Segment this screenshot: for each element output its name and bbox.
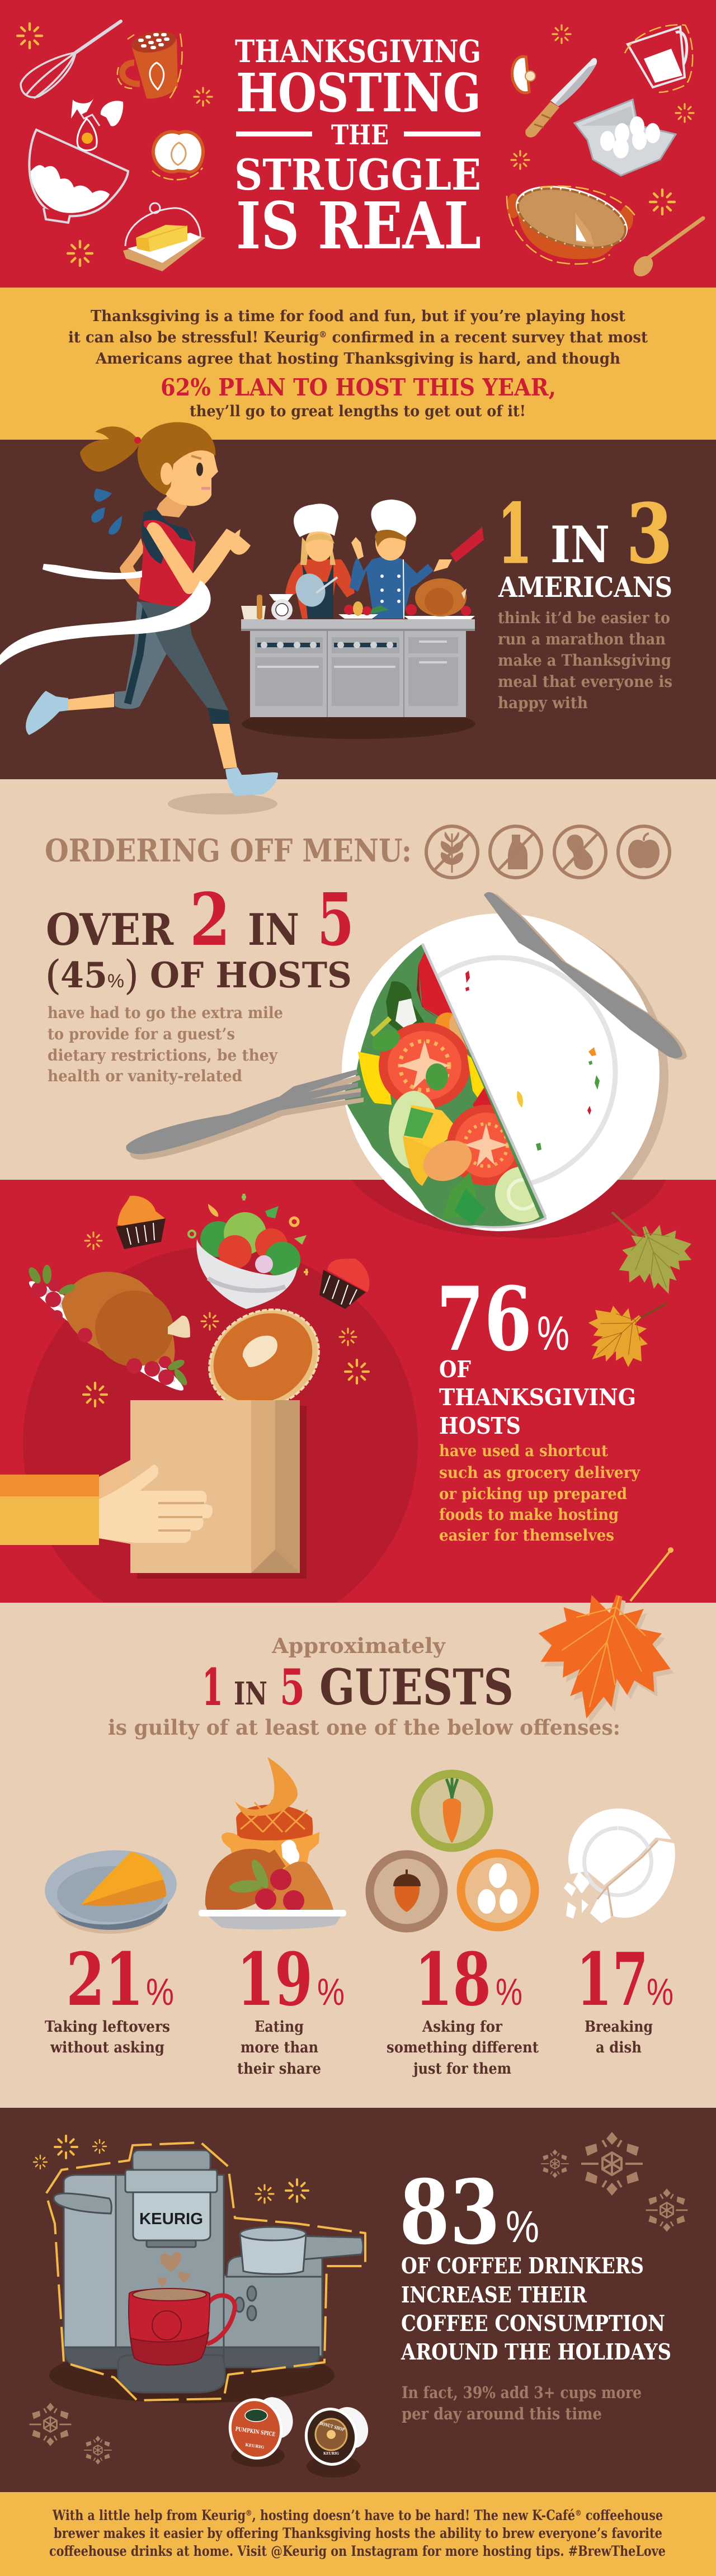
heading: is guilty of at least one of the below offenses: — [108, 1715, 620, 1740]
label: Keurig logo: KEURIG — [139, 2210, 203, 2228]
woman chef — [285, 504, 355, 619]
title: STRUGGLE — [234, 150, 481, 200]
panel: 83% coffee drinkers: OF COFFEE DRINKERS — [401, 2253, 644, 2279]
heading: Approximately — [271, 1633, 446, 1658]
panel: 76% of hosts: foods to make hosting — [439, 1505, 619, 1524]
icon: whisk — [21, 21, 121, 98]
panel: 76% of hosts: have used a shortcut — [439, 1442, 608, 1460]
panel: footer text: , hosting doesn’t have to be hard! The new K-Café — [252, 2507, 575, 2523]
panel: 1 in 3 Americans: IN — [550, 515, 610, 574]
cupcake red — [319, 1259, 370, 1309]
icon: mixing bowl with egg — [29, 98, 128, 223]
panel: 1 in 5 guests — [43, 1633, 675, 2078]
panel: 1 in 3 Americans: run a marathon than — [498, 630, 666, 648]
cupcake orange — [116, 1196, 166, 1249]
panel: 83% coffee drinkers — [399, 2161, 671, 2423]
panel: hero header — [17, 21, 703, 280]
panel: 76% of hosts: OF — [439, 1356, 471, 1383]
panel: 1 in 3 Americans: meal that everyone is — [498, 672, 672, 691]
crumbs — [465, 971, 600, 1151]
title: THE — [331, 119, 389, 151]
stats row: % — [496, 1971, 522, 2013]
title: THANKSGIVING — [235, 33, 481, 69]
icon: eggs in circle — [461, 1853, 535, 1927]
icon: sparkles — [17, 23, 694, 266]
icon: coffee hearts — [158, 2252, 190, 2287]
panel: intro text: it can also be stressful! Keurig — [68, 329, 329, 346]
icon: no dairy — [490, 826, 541, 878]
stats row: Eating — [255, 2018, 304, 2036]
panel: over 2 in 5 hosts: 45 — [60, 954, 107, 996]
icon: apple — [618, 826, 670, 878]
panel: over 2 in 5 hosts: to provide for a guest’s — [48, 1025, 235, 1043]
panel: 1 in 3 Americans — [498, 487, 672, 712]
panel: footer text: With a little help from Keurig — [53, 2507, 286, 2523]
panel: 1 in 3 Americans: 1 — [498, 487, 532, 582]
man chef — [350, 500, 484, 619]
stats row: their share — [237, 2060, 321, 2078]
panel: over 2 in 5 hosts: % — [107, 971, 124, 992]
icon: turkey and pie stack — [199, 1757, 346, 1929]
icon: apple slice — [510, 56, 535, 95]
panel: over 2 in 5 hosts: ) — [124, 952, 139, 999]
panel: 83% coffee drinkers: % — [506, 2202, 539, 2252]
panel: 83% coffee drinkers: 83 — [399, 2161, 500, 2264]
icon: donut shop pod — [300, 2401, 375, 2478]
panel: grocery shortcut illustration — [0, 1194, 418, 1641]
panel: 1 in 3 Americans: think it’d be easier to — [498, 609, 670, 627]
panel: 1 in 3 Americans: happy with — [498, 694, 588, 712]
icon: egg carton — [574, 100, 676, 176]
icon: broken plate — [564, 1809, 675, 1923]
hand holding bag — [0, 1460, 213, 1545]
stats row: a dish — [596, 2039, 642, 2056]
icon: autumn leaves — [569, 1212, 705, 1385]
icon: pumpkin spice pod: PUMPKIN SPICE — [235, 2426, 276, 2438]
stats row: just for them — [412, 2060, 511, 2078]
icon: large orange maple leaf — [520, 1547, 689, 1741]
panel: intro text: they’ll go to great lengths to get out of it! — [190, 403, 526, 420]
heading: ORDERING OFF MENU: — [45, 832, 412, 869]
stats row — [45, 1937, 673, 2078]
panel: 1 in 3 Americans: AMERICANS — [498, 571, 672, 604]
panel: intro text — [68, 308, 648, 420]
icon: no wheat — [426, 826, 478, 878]
stats row: Asking for — [422, 2018, 503, 2036]
panel: 83% coffee drinkers: COFFEE CONSUMPTION — [401, 2311, 665, 2337]
panel: over 2 in 5 hosts: 2 — [190, 878, 230, 962]
salad bowl — [189, 1194, 308, 1309]
panel: intro text: Americans agree that hosting Thanksgiving is hard, and though — [95, 350, 620, 368]
icon: pie slice on plate — [43, 1846, 179, 1934]
stats row: 17 — [576, 1937, 648, 2022]
panel: 76% of hosts — [436, 1212, 705, 1544]
panel: footer text — [49, 2507, 666, 2559]
title: HOSTING — [236, 62, 481, 124]
panel: 76% of hosts: or picking up prepared — [439, 1485, 627, 1503]
title — [234, 33, 481, 264]
panel: 1 in 3 Americans: 3 — [626, 487, 672, 582]
panel: over 2 in 5 hosts: dietary restrictions, be they — [48, 1046, 278, 1065]
icon: halved apple — [152, 132, 203, 180]
panel: 76% of hosts: HOSTS — [439, 1412, 521, 1439]
panel: over 2 in 5 hosts: 5 — [317, 878, 354, 962]
illustration: kitchen counter with chefs — [241, 500, 484, 739]
icon: donut shop pod: DONUT SHOP — [319, 2420, 345, 2432]
heading — [108, 1633, 620, 1740]
icon: mug — [117, 28, 182, 101]
stats row: 18 — [414, 1937, 491, 2022]
panel: 83% coffee drinkers: In fact, 39% add 3+ cups more — [402, 2383, 642, 2402]
dashed outline — [46, 2142, 365, 2400]
panel: 83% coffee drinkers: INCREASE THEIR — [401, 2282, 587, 2308]
panel: ordering off menu — [45, 826, 670, 878]
icon: knife — [525, 58, 597, 138]
panel: over 2 in 5 hosts — [45, 878, 354, 1085]
salad — [342, 944, 551, 1228]
icon: no peanuts — [554, 826, 606, 878]
stats row: more than — [241, 2039, 318, 2056]
stats row: % — [647, 1971, 673, 2013]
panel: intro text: ® — [319, 329, 327, 340]
fork — [126, 1070, 364, 1160]
panel: 1 in 3 Americans: make a Thanksgiving — [498, 651, 671, 670]
callout: 62% plan to host: 62% PLAN TO HOST THIS YEAR, — [161, 374, 556, 401]
panel: intro text: Thanksgiving is a time for food and fun, but if you’re playing host — [91, 308, 626, 325]
panel: over 2 in 5 hosts: ( — [45, 952, 62, 999]
stats row: % — [317, 1971, 345, 2013]
panel: 83% coffee drinkers: per day around this time — [402, 2404, 602, 2423]
panel: over 2 in 5 hosts: health or vanity-related — [48, 1067, 242, 1085]
icon: acorn in circle — [370, 1854, 444, 1928]
stats row: without asking — [50, 2039, 164, 2056]
panel: intro text: confirmed in a recent survey that most — [327, 329, 648, 346]
icon: pie dish — [507, 175, 635, 264]
heading: GUESTS — [319, 1658, 514, 1716]
panel: 76% of hosts: THANKSGIVING — [439, 1384, 636, 1411]
heading: IN — [234, 1675, 267, 1712]
illustration: dinner plate half eaten — [126, 892, 687, 1238]
icon: butter dish — [123, 203, 205, 271]
panel: over 2 in 5 hosts: OF HOSTS — [150, 954, 352, 996]
icon: red mug — [129, 2288, 235, 2365]
panel: over 2 in 5 hosts: IN — [248, 905, 299, 955]
panel: over 2 in 5 hosts: have had to go the extra mile — [48, 1004, 283, 1022]
stats row: Breaking — [585, 2018, 653, 2036]
stats row: 21 — [66, 1937, 144, 2022]
stats row: % — [146, 1971, 174, 2013]
title: IS REAL — [236, 189, 481, 264]
stats row: Taking leftovers — [45, 2018, 170, 2036]
panel: footer text: ® — [246, 2509, 252, 2518]
panel: footer text: coffeehouse — [582, 2507, 663, 2523]
icon: measuring cup — [625, 25, 693, 92]
heading: 5 — [280, 1658, 305, 1716]
panel: coffee machine illustration — [30, 2132, 687, 2478]
heading: 1 — [202, 1658, 223, 1716]
panel: over 2 in 5 hosts: OVER — [46, 905, 174, 955]
panel: 83% coffee drinkers: AROUND THE HOLIDAYS — [401, 2339, 671, 2365]
illustration: runner crossing finish line — [0, 422, 278, 814]
decorations — [30, 2132, 687, 2465]
icon: wooden spoon — [630, 218, 703, 280]
panel: 76% of hosts: easier for themselves — [439, 1526, 614, 1544]
knife — [484, 892, 687, 1060]
icon: pumpkin spice pod — [224, 2391, 299, 2467]
panel: 76% of hosts: such as grocery delivery — [439, 1463, 640, 1482]
turkey platter — [23, 1265, 190, 1399]
stats row: something different — [387, 2039, 539, 2056]
panel: 76% of hosts: 76 — [436, 1268, 532, 1371]
icon: Keurig brewer — [54, 2150, 363, 2393]
icon: carrot in circle — [415, 1774, 489, 1848]
panel: 76% of hosts: % — [537, 1307, 569, 1360]
panel: footer text: ® — [575, 2509, 582, 2518]
sparkles — [83, 1232, 369, 1406]
paper bag — [130, 1400, 307, 1579]
icon: pumpkin spice pod: KEURIG — [245, 2442, 265, 2450]
pumpkin pie — [191, 1290, 337, 1429]
food and tools on counter — [241, 578, 475, 620]
counter — [241, 619, 475, 717]
stats row: 19 — [237, 1937, 313, 2022]
icon: donut shop pod: KEURIG — [323, 2452, 339, 2456]
